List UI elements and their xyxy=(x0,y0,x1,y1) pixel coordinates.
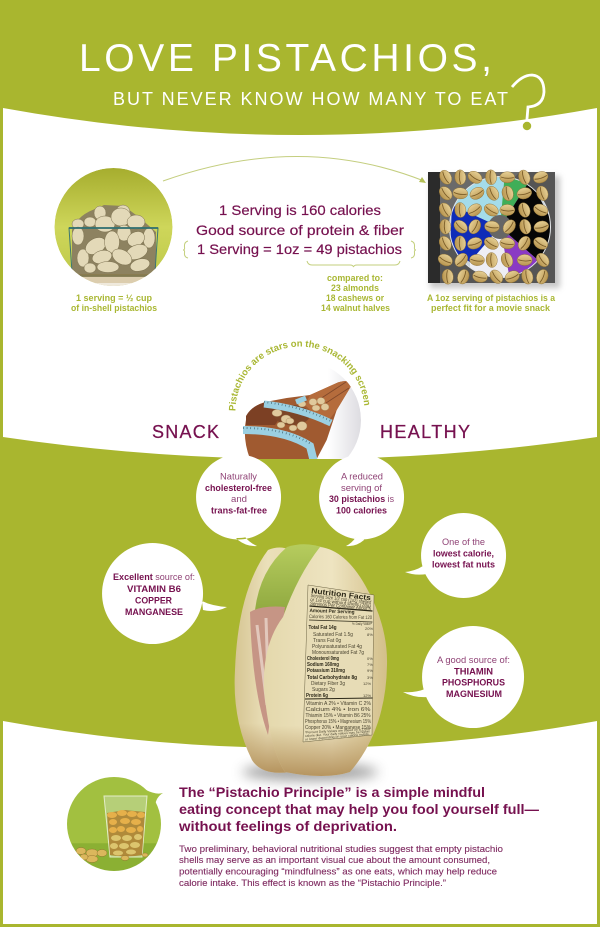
bubble: excellent source: COPPER xyxy=(135,596,172,606)
nutrition label: Sugars 2g xyxy=(312,687,335,693)
nutrition label: Sodium 160mg xyxy=(307,662,339,668)
nutrition label: Phosphorus 15% • Magnesium 15% xyxy=(305,719,371,725)
text: pistachio principle body: potentially encouraging “mindfulness” as one eats, which may help reduce xyxy=(179,866,497,878)
bubble: good source: MAGNESIUM xyxy=(446,689,502,700)
text: compared to: 23 almonds xyxy=(331,283,379,293)
bubble: excellent source: VITAMIN B6 xyxy=(127,584,181,595)
nutrition label: Protein 6g xyxy=(306,693,328,699)
bubble: lowest calorie: lowest fat nuts xyxy=(432,560,495,570)
bubble: 100 calories xyxy=(319,454,404,546)
bubble: cholesterol-free: cholesterol-free xyxy=(205,483,272,494)
heading: healthy: HEALTHY xyxy=(380,422,470,442)
text: compared to xyxy=(321,273,390,313)
text: compared to: compared to: xyxy=(327,273,383,283)
photo: bowl of pistachios xyxy=(54,168,174,288)
text: pistachio principle body: shells may serve as an important visual cue about the amount consumed, xyxy=(179,855,490,866)
nutrition label: Serving Size 1/2 cup (1oz) shelled xyxy=(310,593,372,606)
bubble: cholesterol-free: trans-fat-free xyxy=(211,506,267,516)
nutrition label: calorie diet. Your daily values may be higher xyxy=(305,729,371,738)
bubble: cholesterol-free: Naturally xyxy=(220,472,257,482)
nutrition label: Calcium 4% • Iron 6% xyxy=(306,707,371,713)
nutrition label: Total Carbohydrate 8g xyxy=(307,675,357,681)
nutrition label: Vitamin A 2% • Vitamin C 2% xyxy=(306,701,372,707)
title: LOVE PISTACHIOS, xyxy=(79,37,492,80)
nutrition label: Monounsaturated Fat 7g xyxy=(312,650,364,656)
nutrition label: Dietary Fiber 3g xyxy=(311,681,345,687)
icon: question mark xyxy=(512,75,544,130)
text: compared to: 14 walnut halves xyxy=(321,303,390,313)
nutrition label: 7% xyxy=(367,662,373,667)
nutrition label: 20% xyxy=(365,626,373,631)
caption: bowl xyxy=(71,293,157,313)
nutrition label: 12% xyxy=(363,681,371,686)
text: serving summary: 1 Serving is 160 calories xyxy=(219,202,381,218)
bubble: 100 calories: 30 pistachios is xyxy=(329,494,394,505)
bubble: excellent source: Excellent source of: xyxy=(113,572,195,583)
nutrition label: Copper 20% • Manganese 15% xyxy=(305,725,372,731)
heading: snack: SNACK xyxy=(152,422,219,442)
caption: movie snack: A 1oz serving of pistachios is a xyxy=(427,293,556,303)
nutrition label: *Percent Daily Values are based on a 2,000 xyxy=(305,727,370,734)
braces xyxy=(183,241,416,267)
text: serving summary xyxy=(196,202,404,257)
nutrition label: Cholesterol 0mg xyxy=(307,656,339,662)
bubble: excellent source: MANGANESE xyxy=(125,607,183,618)
nutrition label: or 1/4 cup without shells (28g) xyxy=(310,597,371,609)
photo: glass of pistachio shells xyxy=(67,777,163,871)
nutrition label: Saturated Fat 1.5g xyxy=(313,632,353,638)
caption: bowl: of in-shell pistachios xyxy=(71,303,157,313)
nutrition label: 12% xyxy=(363,693,371,698)
heading: pistachio principle: The “Pistachio Principle” is a simple mindful xyxy=(179,784,485,800)
bubble: excellent source xyxy=(102,543,227,644)
nutrition label: 8% xyxy=(367,632,373,637)
bubble: lowest calorie xyxy=(405,513,506,598)
bubble: lowest calorie: One of the xyxy=(442,537,485,548)
photo: hand holding nuts with tape measure xyxy=(243,372,361,459)
nutrition label: Polyunsaturated Fat 4g xyxy=(312,644,362,650)
nutrition label: 3% xyxy=(367,675,373,680)
nutrition label: Trans Fat 0g xyxy=(313,638,341,644)
caption: bowl: 1 serving = ½ cup xyxy=(76,293,152,303)
arc heading: Pistachios are stars on the snacking screen xyxy=(228,340,370,410)
nutrition label: Calories 160 Calories from Fat 120 xyxy=(309,614,372,621)
bubble: good source: PHOSPHORUS xyxy=(442,678,505,688)
nutrition label: % Daily Value* xyxy=(352,621,372,626)
heading: pistachio principle: without feelings of deprivation. xyxy=(178,818,397,834)
bubble: good source: A good source of: xyxy=(437,655,510,666)
nutrition label: Servings Per Container About 5 xyxy=(310,601,371,612)
pistachio with nutrition label xyxy=(235,544,387,781)
bubble: cholesterol-free: and xyxy=(231,494,247,505)
title xyxy=(79,37,508,109)
photo: disc case covered with pistachios xyxy=(428,168,560,288)
text: pistachio principle body: calorie intake. This effect is known as the “Pistachio Principle.” xyxy=(179,878,446,889)
heading: pistachio principle xyxy=(178,784,539,834)
bubble: good source xyxy=(403,626,524,728)
bubble: good source: THIAMIN xyxy=(454,666,493,678)
arrow: from bowl to movie case xyxy=(163,156,426,183)
bubble: 100 calories: A reduced xyxy=(341,472,383,482)
text: serving summary: Good source of protein & fiber xyxy=(196,222,404,238)
nutrition label: 0% xyxy=(367,656,373,661)
text: compared to: 18 cashews or xyxy=(326,293,384,303)
caption: movie snack xyxy=(427,293,556,313)
bubble: 100 calories: 100 calories xyxy=(336,506,387,516)
nutrition label: Thiamin 15% • Vitamin B6 25% xyxy=(306,713,371,719)
nutrition label: Amount Per Serving xyxy=(309,608,355,616)
title: BUT NEVER KNOW HOW MANY TO EAT xyxy=(113,89,508,109)
bubble: cholesterol-free xyxy=(196,454,281,546)
nutrition label: 9% xyxy=(367,668,373,673)
nutrition label xyxy=(303,585,374,742)
caption: movie snack: perfect fit for a movie snack xyxy=(431,303,551,313)
green band xyxy=(3,437,597,748)
nutrition label: or lower depending on your calorie needs. xyxy=(305,732,370,741)
text: pistachio principle body: Two preliminary, behavioral nutritional studies suggest that empty pistachio xyxy=(179,844,503,855)
nutrition label: Total Fat 14g xyxy=(308,625,336,631)
bubble: 100 calories: serving of xyxy=(341,483,382,494)
nutrition label: Potassium 310mg xyxy=(307,668,345,674)
text: serving summary: 1 Serving = 1oz = 49 pistachios xyxy=(197,241,402,257)
nutrition label: Nutrition Facts xyxy=(311,586,371,602)
text: pistachio principle body xyxy=(179,844,503,889)
heading: pistachio principle: eating concept that may help you fool yourself full— xyxy=(179,801,539,817)
bubble: lowest calorie: lowest calorie, xyxy=(433,548,494,560)
